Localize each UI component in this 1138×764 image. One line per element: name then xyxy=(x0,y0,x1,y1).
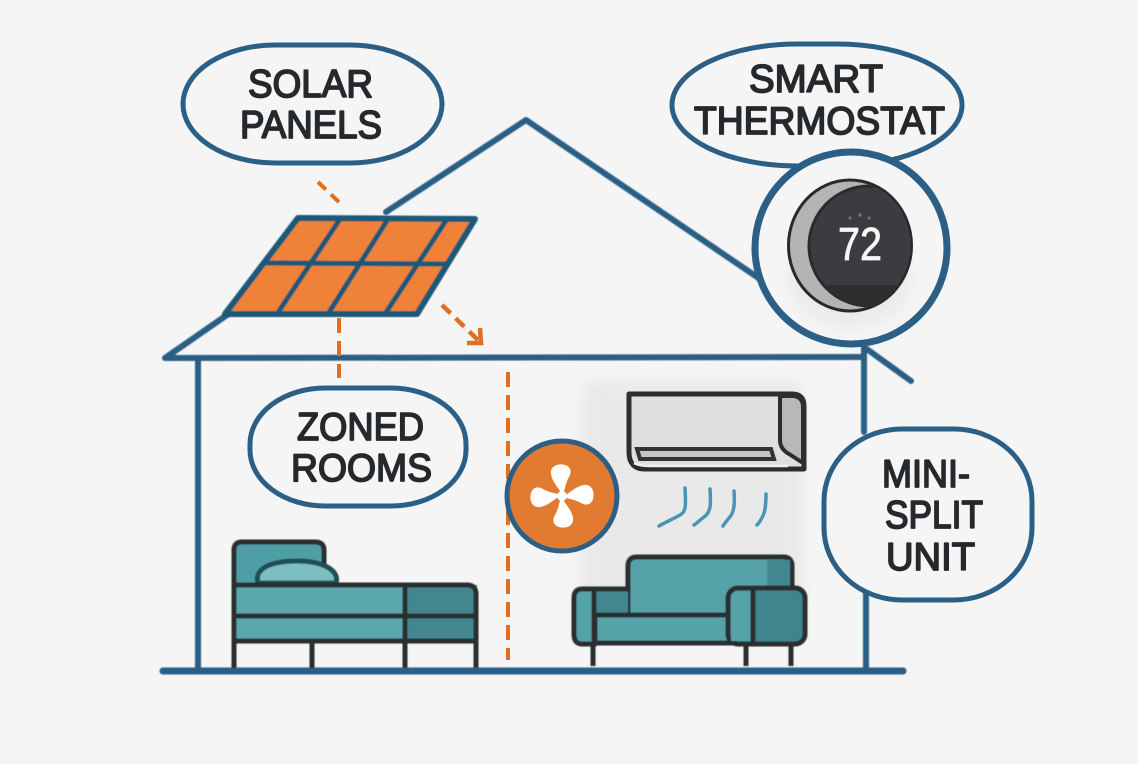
mini-split glow backdrop xyxy=(582,380,804,602)
label: solar panels: SOLAR xyxy=(248,63,373,106)
label: solar panels: PANELS xyxy=(240,104,382,147)
icon: thermostat dial xyxy=(787,178,913,312)
label: smart thermostat: SMART xyxy=(749,58,883,101)
label: mini-split unit: UNIT xyxy=(886,536,975,579)
label: zoned rooms: ROOMS xyxy=(291,447,432,490)
dashed connector: solar label to panel xyxy=(318,182,343,206)
dashed zone divider xyxy=(506,372,510,660)
dashed connector: panel to zoned rooms xyxy=(337,318,341,378)
temperature reading: 72 xyxy=(838,218,882,270)
airflow lines xyxy=(659,488,766,526)
label: solar panels xyxy=(183,45,442,163)
thermostat magnifier xyxy=(755,152,947,344)
label: smart thermostat xyxy=(672,44,962,166)
sofa xyxy=(574,557,805,666)
bed xyxy=(234,542,477,668)
label: zoned rooms xyxy=(250,388,466,506)
icon: fan xyxy=(507,441,617,551)
label: zoned rooms: ZONED xyxy=(297,406,424,449)
label: mini-split unit: MINI- xyxy=(882,453,970,496)
label: mini-split unit xyxy=(824,429,1032,600)
dashed arrow: panel to house xyxy=(442,305,481,343)
icon: mini-split unit xyxy=(629,394,804,469)
label: smart thermostat: THERMOSTAT xyxy=(694,100,945,143)
tick marks xyxy=(848,213,870,220)
solar panel xyxy=(225,218,475,314)
label: mini-split unit: SPLIT xyxy=(885,494,983,537)
house outline xyxy=(163,120,911,671)
